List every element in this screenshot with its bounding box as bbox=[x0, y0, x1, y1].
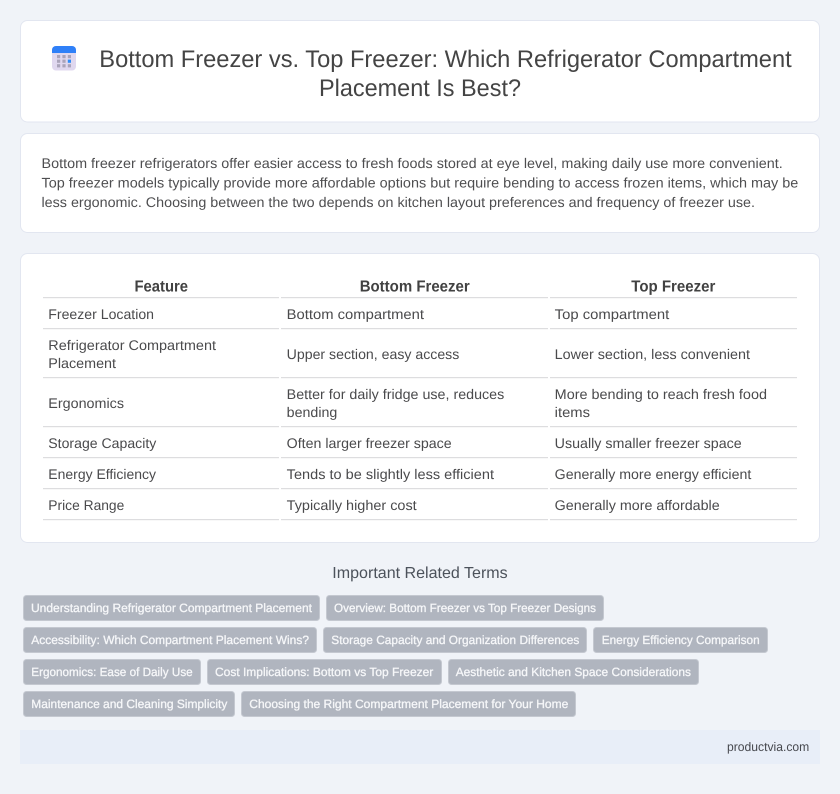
row: freezer location bbox=[48, 306, 669, 322]
chip bbox=[208, 660, 442, 684]
row: refrigerator compartment placement: Refrigerator Compartment bbox=[48, 337, 216, 353]
table header row: Bottom Freezer bbox=[360, 278, 470, 296]
row: storage capacity bbox=[48, 435, 742, 451]
row: ergonomics bbox=[48, 386, 767, 420]
chip: Maintenance and Cleaning Simplicity bbox=[31, 697, 227, 711]
row: ergonomics: More bending to reach fresh food bbox=[555, 386, 767, 402]
footer bbox=[20, 730, 820, 764]
row: price range: Typically higher cost bbox=[287, 497, 417, 513]
row: storage capacity: Storage Capacity bbox=[48, 435, 156, 451]
description text: less ergonomic. Choosing between the two depends on kitchen layout preferences and frequency of freezer use. bbox=[42, 194, 755, 210]
panel: header bbox=[20, 20, 820, 122]
row: ergonomics: bending bbox=[287, 404, 337, 420]
chip bbox=[24, 692, 234, 716]
title: Bottom Freezer vs. Top Freezer: Which Refrigerator Compartment bbox=[99, 46, 792, 73]
heading: important related terms: Important Related Terms bbox=[332, 565, 508, 582]
description text: Top freezer models typically provide more affordable options but require bending to access frozen items, which may be bbox=[42, 174, 799, 190]
icon: calendar bbox=[52, 46, 76, 70]
description text: Bottom freezer refrigerators offer easier access to fresh foods stored at eye level, making daily use more convenient. bbox=[42, 155, 783, 171]
row: refrigerator compartment placement: Upper section, easy access bbox=[287, 346, 459, 362]
row: energy efficiency: Energy Efficiency bbox=[48, 466, 156, 482]
row: energy efficiency: Tends to be slightly less efficient bbox=[287, 466, 494, 482]
chip bbox=[448, 660, 698, 684]
row: freezer location: Freezer Location bbox=[48, 306, 154, 322]
panel: comparison table bbox=[20, 254, 820, 542]
related term chips bbox=[24, 596, 768, 716]
row: energy efficiency: Generally more energy efficient bbox=[555, 466, 751, 482]
chip bbox=[242, 692, 576, 716]
chip bbox=[324, 628, 586, 652]
chip bbox=[24, 596, 320, 620]
chip: Ergonomics: Ease of Daily Use bbox=[31, 665, 193, 679]
row: ergonomics: Better for daily fridge use, reduces bbox=[287, 386, 504, 402]
chip: Understanding Refrigerator Compartment Placement bbox=[31, 601, 313, 615]
panel: description bbox=[20, 134, 820, 232]
chip: Cost Implications: Bottom vs Top Freezer bbox=[215, 665, 433, 679]
chip: Energy Efficiency Comparison bbox=[602, 633, 760, 647]
footer source text: productvia.com bbox=[727, 740, 809, 754]
row: storage capacity: Often larger freezer space bbox=[287, 435, 452, 451]
row: storage capacity: Usually smaller freezer space bbox=[555, 435, 742, 451]
row: energy efficiency bbox=[48, 466, 751, 482]
table header row bbox=[134, 278, 715, 296]
chip bbox=[594, 628, 768, 652]
row: freezer location: Bottom compartment bbox=[287, 306, 424, 322]
chip bbox=[326, 596, 604, 620]
chip: Accessibility: Which Compartment Placement Wins? bbox=[31, 633, 309, 647]
row: price range bbox=[48, 497, 720, 513]
row: ergonomics: Ergonomics bbox=[48, 395, 124, 411]
row: refrigerator compartment placement bbox=[48, 337, 750, 371]
chip: Choosing the Right Compartment Placement for Your Home bbox=[249, 697, 569, 711]
row: freezer location: Top compartment bbox=[555, 306, 669, 322]
title bbox=[99, 46, 792, 102]
row: refrigerator compartment placement: Placement bbox=[48, 355, 116, 371]
table header row: Feature bbox=[134, 278, 188, 296]
row: price range: Generally more affordable bbox=[555, 497, 720, 513]
row: ergonomics: items bbox=[555, 404, 590, 420]
description text bbox=[42, 155, 799, 210]
chip bbox=[24, 660, 200, 684]
chip: Aesthetic and Kitchen Space Considerations bbox=[456, 665, 691, 679]
row: refrigerator compartment placement: Lower section, less convenient bbox=[555, 346, 750, 362]
chip: Storage Capacity and Organization Differences bbox=[331, 633, 579, 647]
chip bbox=[24, 628, 316, 652]
row: price range: Price Range bbox=[48, 497, 125, 513]
title: Placement Is Best? bbox=[319, 75, 521, 102]
table header row: Top Freezer bbox=[631, 278, 715, 296]
chip: Overview: Bottom Freezer vs Top Freezer Designs bbox=[334, 601, 596, 615]
